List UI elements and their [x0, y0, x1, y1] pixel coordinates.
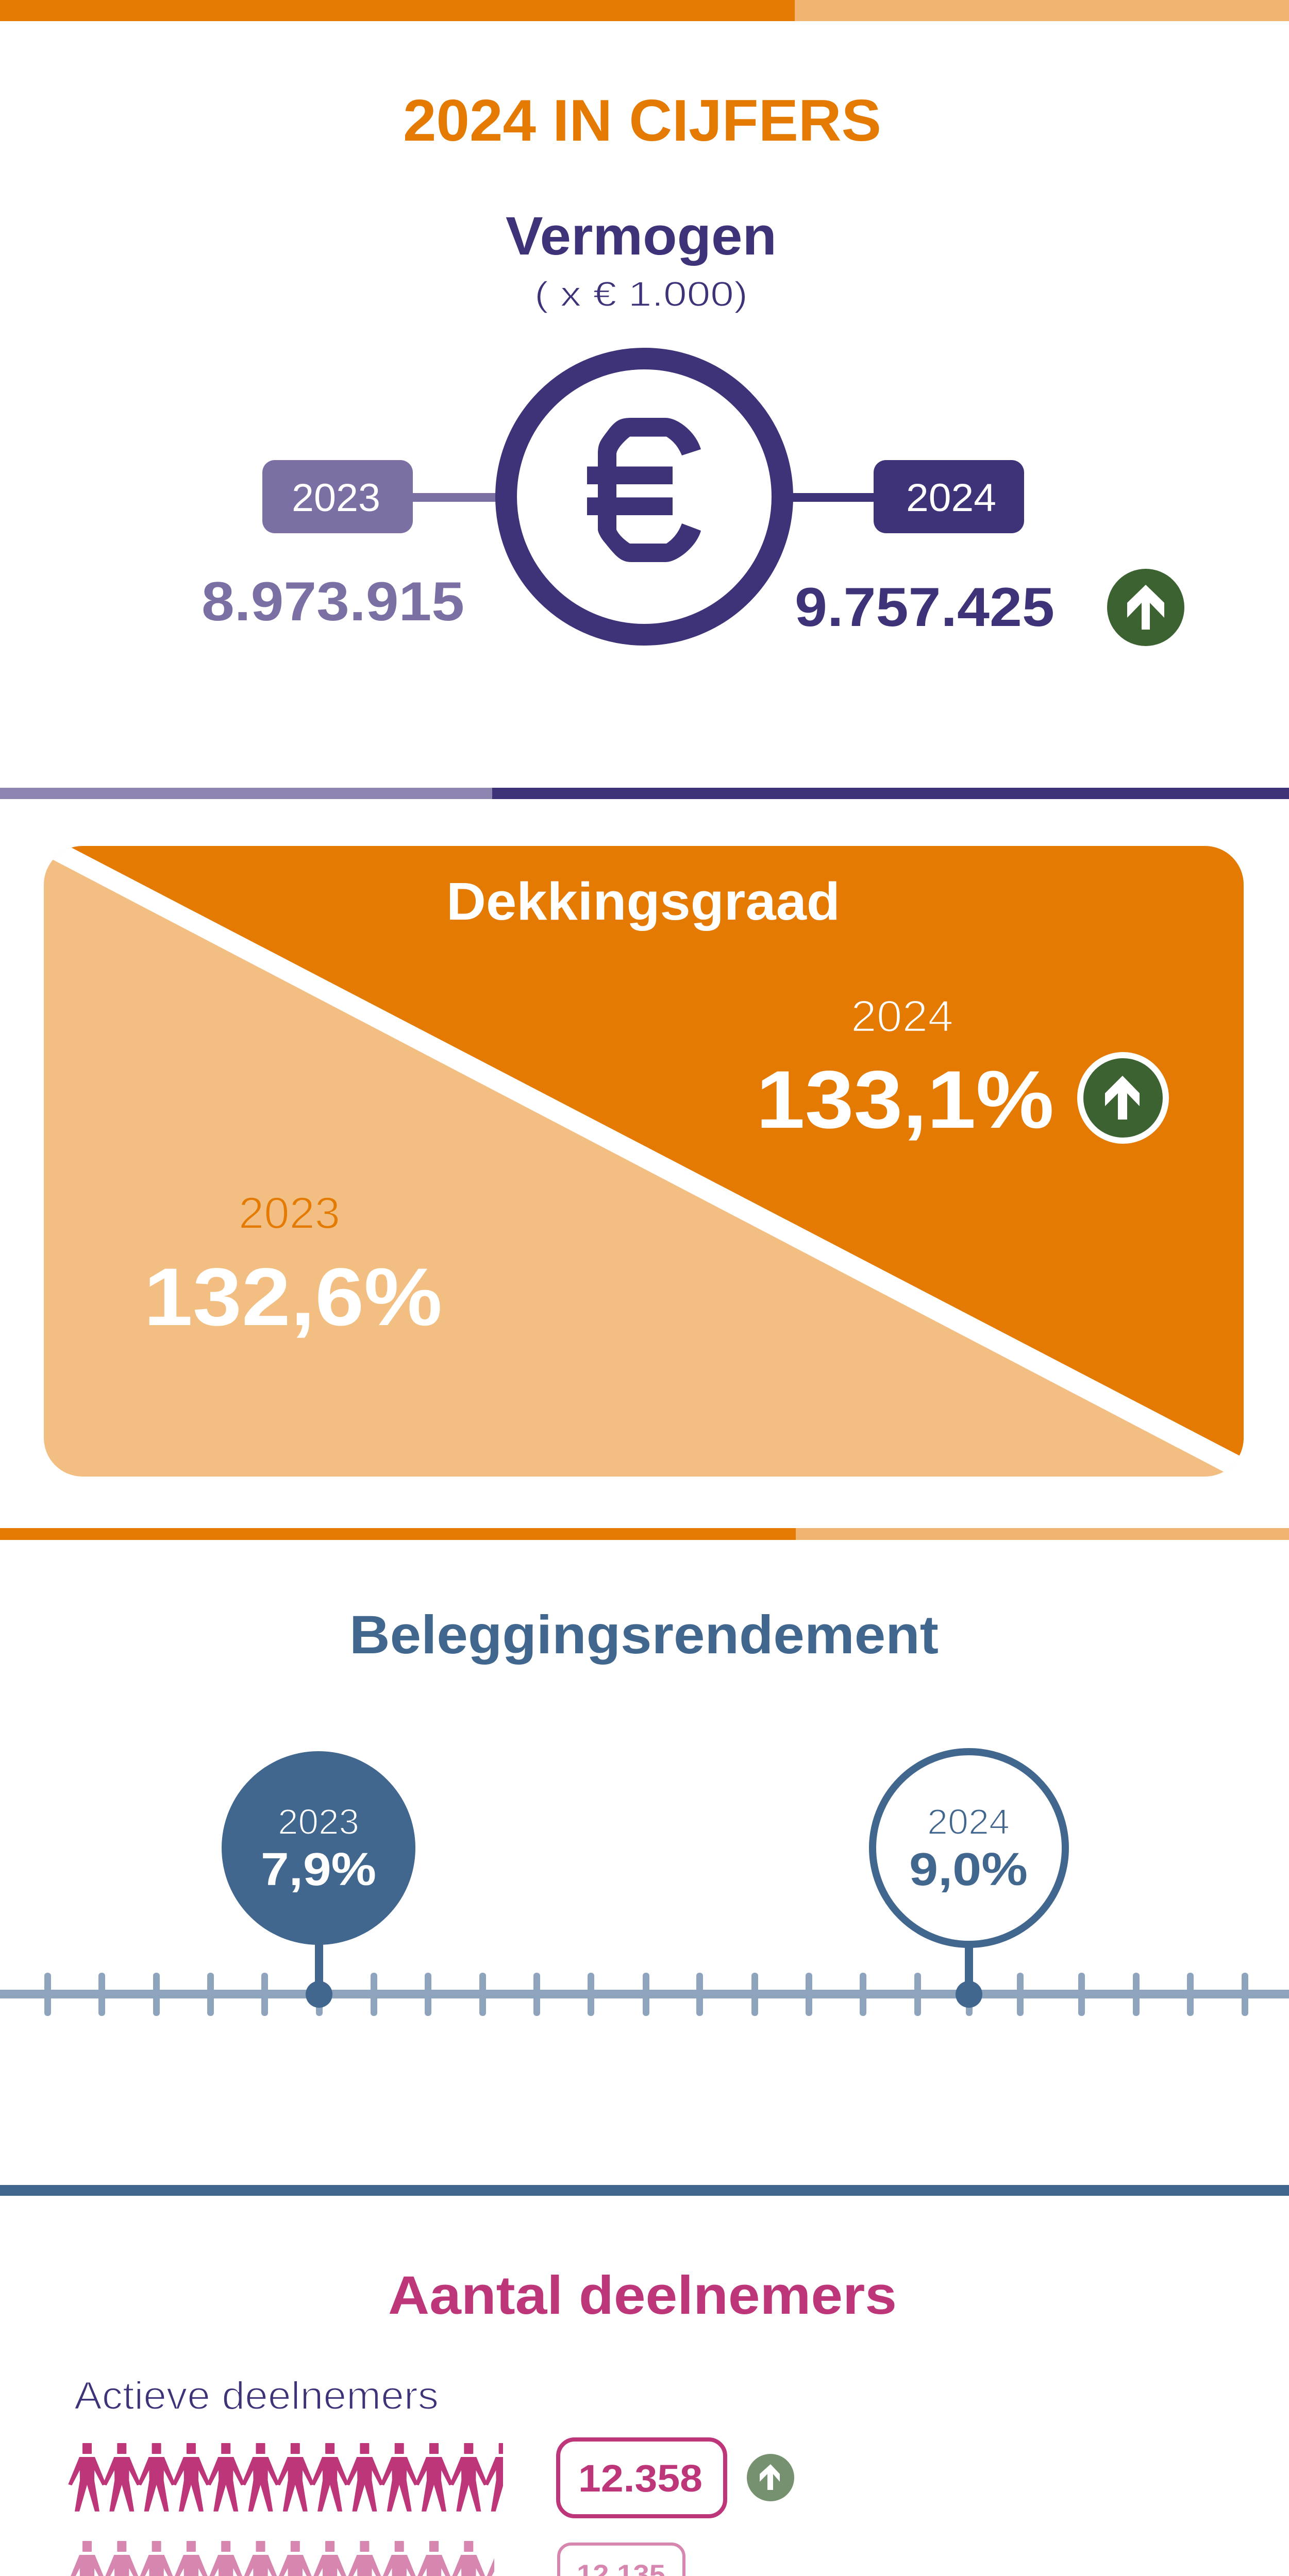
panel: Vermogen — [202, 206, 1184, 646]
value badge 2024: 12.358 — [578, 2457, 702, 2500]
pictogram row 2023 — [68, 2541, 522, 2576]
marker 2023: 7,9% — [261, 1844, 376, 1895]
panel: Beleggingsrendement — [0, 1605, 1289, 2016]
diagonal split card — [44, 846, 1244, 1477]
label: Actieve deelnemers: Actieve deelnemers — [74, 2374, 439, 2418]
icon: up arrow — [1107, 569, 1184, 646]
subheading: x 1000 euro: ( x € 1.000) — [534, 275, 748, 314]
value 2023: 8.973.915 — [202, 570, 464, 632]
icon: up arrow — [1080, 1055, 1166, 1141]
heading: Vermogen: Vermogen — [506, 206, 777, 266]
top colour bar — [0, 0, 1289, 21]
heading: Aantal deelnemers: Aantal deelnemers — [388, 2265, 897, 2326]
timeline axis — [0, 1973, 1289, 2016]
marker 2023 — [222, 1751, 415, 2008]
value badge 2023 — [559, 2544, 684, 2576]
value badge 2024 — [558, 2439, 725, 2516]
label 2023: 2023 — [239, 1189, 340, 1238]
title: 2024 IN CIJFERS — [403, 88, 881, 154]
group: Actieve deelnemers — [68, 2374, 794, 2576]
panel: Dekkingsgraad — [44, 846, 1244, 1477]
value 2024: 133,1% — [756, 1054, 1054, 1145]
marker 2024: 2024 — [927, 1802, 1010, 1842]
value 2023: 132,6% — [144, 1251, 442, 1343]
label box 2024: 2024 — [906, 476, 996, 520]
connector 2024 — [791, 493, 876, 502]
heading: Beleggingsrendement: Beleggingsrendement — [349, 1605, 939, 1665]
icon: euro coin — [506, 359, 782, 635]
label box 2023 — [262, 460, 413, 533]
heading: Dekkingsgraad: Dekkingsgraad — [446, 872, 840, 931]
icon: up arrow — [747, 2454, 794, 2501]
label 2024: 2024 — [851, 992, 953, 1041]
connector 2023 — [410, 493, 497, 502]
divider bar: Dekkingsgraad — [0, 1528, 1289, 1540]
label box 2023: 2023 — [292, 476, 380, 520]
panel: Aantal deelnemers — [68, 2275, 895, 2576]
divider bar: Vermogen — [0, 788, 1289, 799]
pictogram row 2024 — [68, 2443, 522, 2512]
marker 2024 — [873, 1752, 1065, 2008]
divider bar: Beleggingsrendement — [0, 2185, 1289, 2196]
value 2024: 9.757.425 — [795, 576, 1054, 638]
marker 2024: 9,0% — [909, 1844, 1028, 1895]
marker 2023: 2023 — [278, 1802, 359, 1842]
label box 2024 — [874, 460, 1024, 533]
